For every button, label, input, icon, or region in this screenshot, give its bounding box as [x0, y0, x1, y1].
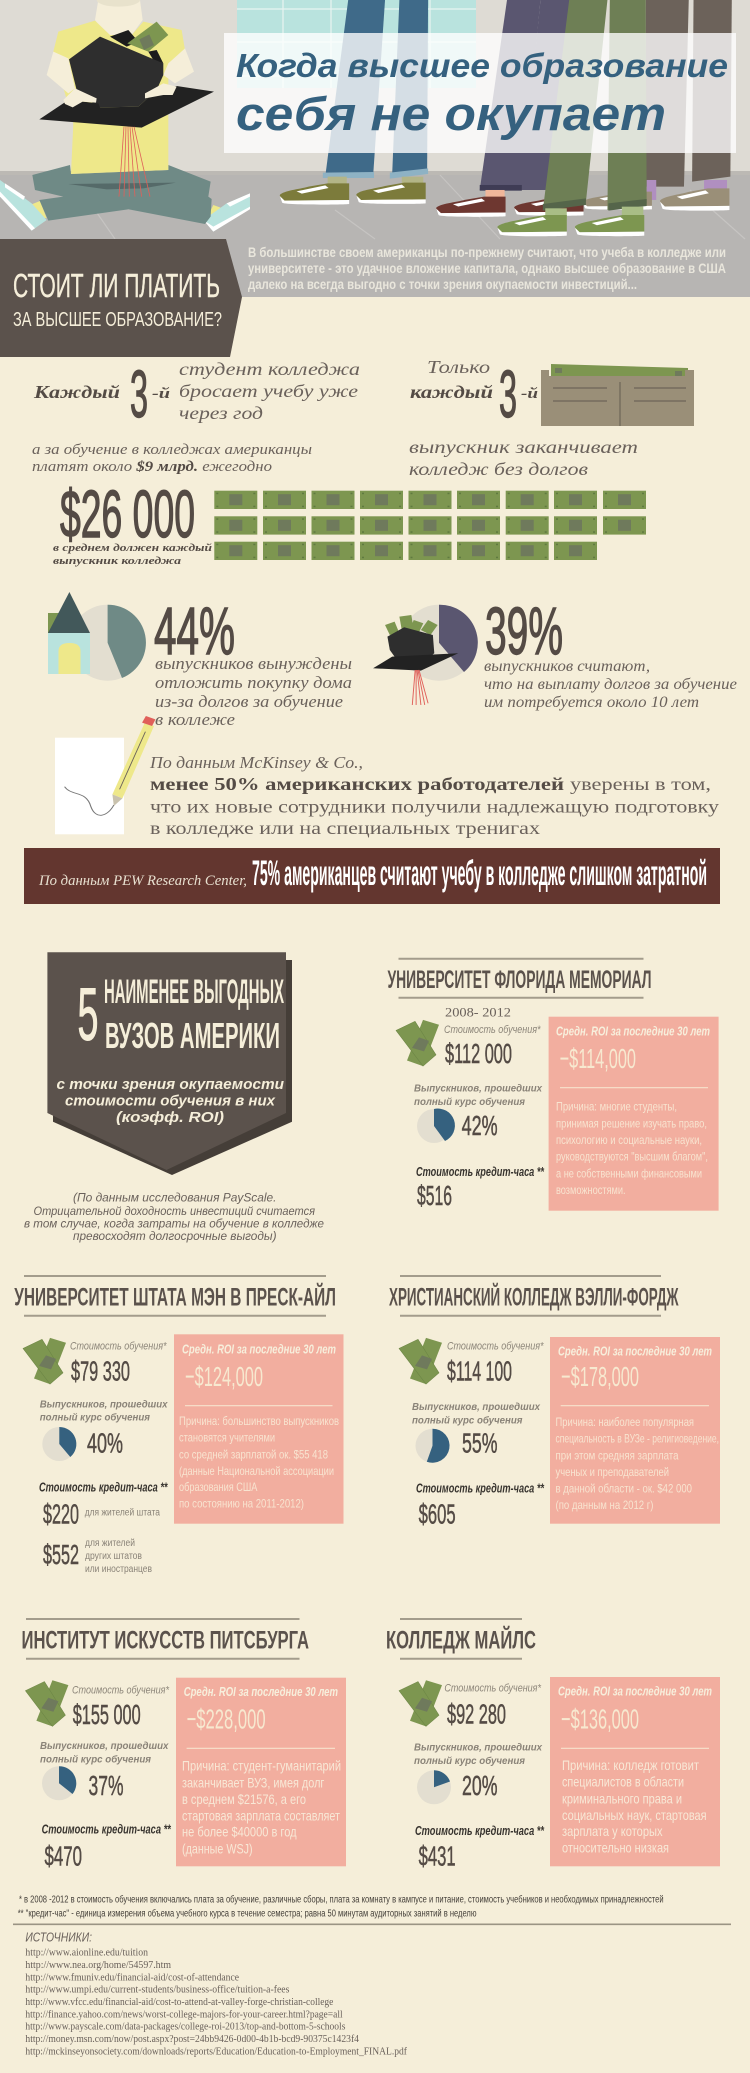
footnotes [18, 1894, 664, 1920]
intro text [248, 245, 726, 292]
panel: University of Maine at Presque Isle: других штатов [85, 1551, 142, 1562]
panel: Florida Memorial: психологию и социальные науки, [556, 1133, 702, 1147]
panel: Art Institute of Pittsburgh: Средн. ROI за последние 30 лет [184, 1685, 338, 1699]
panel: Florida Memorial: Стоимость обучения* [444, 1024, 541, 1036]
panel: Florida Memorial: $112 000 [445, 1038, 512, 1069]
panel: Art Institute of Pittsburgh: −$228,000 [187, 1703, 266, 1734]
banner: PEW Research: По данным PEW Research Center, [38, 873, 247, 889]
shield: five least profitable: (коэфф. ROI) [116, 1110, 224, 1126]
panel: University of Maine at Presque Isle: (данные Национальной ассоциации [179, 1464, 334, 1478]
text: McKinsey: менее 50% американских работодателей [150, 774, 564, 794]
banner: is it worth paying [0, 239, 242, 357]
panel: University of Maine at Presque Isle: −$124,000 [185, 1361, 263, 1392]
stat: 26000 debt: $26 000 [60, 477, 195, 552]
panel: University of Maine at Presque Isle: $552 [43, 1539, 79, 1570]
panel: Art Institute of Pittsburgh: $155 000 [73, 1699, 141, 1730]
stat: every third student drops out: через год [179, 403, 263, 423]
panel: Miles College: специалистов в области [562, 1774, 684, 1790]
panel: Art Institute of Pittsburgh [22, 1619, 346, 1872]
panel: Valley Forge Christian College: Выпускников, прошедших [412, 1401, 541, 1413]
stat: every third graduate without debt: Только [427, 357, 490, 377]
stat: every third graduate without debt: 3 [499, 357, 517, 432]
panel: University of Maine at Presque Isle: полный курс обучения [40, 1412, 150, 1424]
text: 9 billion: а за обучение в колледжах американцы [32, 442, 312, 458]
panel: Valley Forge Christian College: Стоимость кредит-часа ** [416, 1481, 545, 1495]
panel: University of Maine at Presque Isle: Средн. ROI за последние 30 лет [182, 1342, 336, 1356]
text: НАИМЕНЕЕ ВЫГОДНЫХ [104, 973, 284, 1011]
panel: Miles College: социальных наук, стартовая [562, 1807, 707, 1823]
panel: Art Institute of Pittsburgh: не более $40000 в год [182, 1824, 297, 1840]
panel: Valley Forge Christian College: Стоимость обучения* [447, 1340, 544, 1352]
text: McKinsey [149, 753, 719, 838]
panel: Valley Forge Christian College: (по данным на 2012 г) [556, 1498, 654, 1512]
shield: five least profitable: 5 [78, 973, 98, 1056]
stat 39% [484, 594, 737, 711]
stat 44%: из-за долгов за обучение [155, 692, 343, 711]
panel: Art Institute of Pittsburgh: ИНСТИТУТ ИСКУССТВ ПИТСБУРГА [22, 1626, 309, 1654]
stat 39%: им потребуется около 10 лет [484, 694, 699, 711]
title box: Когда высшее образование [236, 47, 728, 84]
panel: Art Institute of Pittsburgh: стартовая зарплата составляет [182, 1808, 340, 1824]
panel: Florida Memorial: руководствуются "высшим благом", [556, 1150, 708, 1164]
panel: Florida Memorial [388, 959, 719, 1211]
sources: http://finance.yahoo.com/news/worst-college-majors-for-your-career.html?page=all [25, 2009, 343, 2020]
stat: every third graduate without debt [409, 357, 638, 479]
shield: five least profitable [47, 952, 292, 1175]
panel: Valley Forge Christian College: 55% [462, 1428, 498, 1459]
panel: Miles College: $431 [419, 1841, 456, 1872]
panel: University of Maine at Presque Isle: для жителей [85, 1538, 135, 1549]
note: PayScale: (По данным исследования PayScale. [73, 1193, 276, 1205]
icon: wallet [541, 364, 694, 426]
banknote rows [214, 491, 646, 560]
panel: Miles College: 20% [462, 1770, 498, 1801]
panel: Florida Memorial: 2008- 2012 [445, 1005, 511, 1020]
stat: every third student drops out: бросает учебу уже [179, 381, 358, 401]
note: PayScale: превосходят долгосрочные выгоды) [73, 1231, 277, 1243]
panel: University of Maine at Presque Isle: 40% [87, 1427, 123, 1458]
panel: University of Maine at Presque Isle: Выпускников, прошедших [40, 1398, 169, 1410]
panel: Florida Memorial: Выпускников, прошедших [414, 1083, 543, 1095]
panel: Florida Memorial: 42% [462, 1110, 498, 1141]
panel: University of Maine at Presque Isle: для жителей штата [85, 1508, 160, 1519]
stat: every third student drops out: студент колледжа [179, 359, 360, 379]
pie and house icon 44% [48, 592, 146, 681]
sources: http://money.msn.com/now/post.aspx?post=24bb9426-0d00-4b1b-bcd9-90375c1423f4 [25, 2034, 359, 2045]
pie and hat icon 39% [373, 605, 478, 705]
panel: Miles College: полный курс обучения [414, 1755, 525, 1767]
note: PayScale: в том случае, когда затраты на обучение в колледже [24, 1219, 324, 1231]
window [237, 0, 476, 88]
stat 44%: отложить покупку дома [155, 673, 352, 692]
panel: Valley Forge Christian College: в данной области - ок. $42 000 [556, 1481, 692, 1495]
title box [224, 33, 736, 153]
panel: Art Institute of Pittsburgh: Стоимость кредит-часа ** [42, 1822, 172, 1836]
intro text: далеко на всегда выгодно с точки зрения окупаемости инвестиций... [248, 277, 637, 292]
panel: Valley Forge Christian College: ученых и преподавателей [556, 1465, 669, 1479]
panel: Art Institute of Pittsburgh: Стоимость обучения* [72, 1684, 170, 1696]
panel: Florida Memorial: а не собственными финансовыми [556, 1166, 702, 1180]
panel: Valley Forge Christian College [389, 1276, 720, 1529]
shield: five least profitable: стоимости обучения в них [65, 1094, 276, 1110]
person with hat and bag [0, 0, 250, 232]
panel: University of Maine at Presque Isle: или иностранцев [85, 1564, 152, 1575]
panel: Valley Forge Christian College: −$178,000 [561, 1361, 639, 1392]
legs and shoes of the crowd [280, 0, 732, 236]
sources: http://www.vfcc.edu/financial-aid/cost-to-attend-at-valley-forge-christian-college [25, 1997, 334, 2008]
panel: Valley Forge Christian College: при этом средняя зарплата [556, 1448, 679, 1462]
shield: five least profitable: с точки зрения окупаемости [56, 1077, 284, 1093]
text: McKinsey: в колледже или на специальных тренигах [150, 818, 540, 838]
panel: University of Maine at Presque Isle: $79 330 [71, 1356, 130, 1387]
shield: five least profitable: ВУЗОВ АМЕРИКИ [105, 1015, 280, 1056]
stat: 26000 debt [53, 477, 212, 567]
sources: http://www.payscale.com/data-packages/college-roi-2013/top-and-bottom-5-schools [25, 2022, 345, 2033]
panel: Art Institute of Pittsburgh: (данные WSJ) [182, 1840, 253, 1856]
text: 9 billion [32, 442, 312, 475]
panel: Florida Memorial: полный курс обучения [414, 1096, 525, 1108]
sources: http://www.umpi.edu/current-students/business-office/tuition-a-fees [25, 1985, 290, 1996]
stat 44%: 44% [154, 594, 235, 669]
text: McKinsey: что их новые сотрудники получили надлежащую подготовку [150, 797, 719, 817]
sources: http://www.fmuniv.edu/financial-aid/cost-of-attendance [25, 1972, 240, 1983]
text: 9 billion: платят около $9 млрд. ежегодно [32, 459, 273, 475]
panel: Miles College: Выпускников, прошедших [414, 1742, 543, 1754]
panel: University of Maine at Presque Isle: УНИВЕРСИТЕТ ШТАТА МЭН В ПРЕСК-АЙЛ [14, 1282, 336, 1312]
text: McKinsey: уверены в том, [570, 774, 711, 794]
stat 44%: в коллеже [155, 710, 236, 729]
stat: 26000 debt: выпускник колледжа [53, 555, 182, 567]
panel: Miles College: криминального права и [562, 1790, 682, 1806]
panel: Miles College: относительно низкая [562, 1840, 669, 1856]
panel: Miles College: Причина: колледж готовит [562, 1757, 699, 1773]
text: McKinsey: По данным McKinsey & Co., [149, 753, 363, 772]
panel: University of Maine at Presque Isle [14, 1276, 344, 1575]
panel: Valley Forge Christian College: Причина: наиболее популярная [556, 1415, 694, 1429]
panel: University of Maine at Presque Isle: $220 [43, 1498, 79, 1529]
note: PayScale: Отрицательной доходность инвестиций считается [34, 1206, 315, 1218]
panel: Miles College: Стоимость обучения* [444, 1683, 542, 1695]
panel: Florida Memorial: $516 [417, 1180, 452, 1211]
panel: Art Institute of Pittsburgh: Причина: студент-гуманитарий [182, 1758, 341, 1774]
note: PayScale [24, 1193, 324, 1243]
panel: Florida Memorial: возможностями. [556, 1183, 626, 1197]
icon: paper and pencil [55, 716, 155, 834]
panel: Valley Forge Christian College: $605 [419, 1498, 456, 1529]
panel: University of Maine at Presque Isle: образования США [179, 1480, 257, 1494]
panel: University of Maine at Presque Isle: Причина: большинство выпускников [179, 1414, 339, 1428]
stat: 26000 debt: в среднем должен каждый [53, 542, 212, 554]
stat: every third graduate without debt: выпускник заканчивает [409, 437, 638, 457]
sources: http://www.aionline.edu/tuition [25, 1948, 148, 1959]
footnotes: ** "кредит-час" - единица измерения объема учебного курса в течение семестра; равна 50 минутам аудиторных занятий в неделю [18, 1908, 477, 1920]
panel: University of Maine at Presque Isle: Стоимость обучения* [70, 1340, 167, 1352]
stat 39%: выпускников считают, [484, 658, 650, 675]
header illustration [0, 0, 750, 297]
banner: is it worth paying: СТОИТ ЛИ ПЛАТИТЬ [13, 267, 220, 304]
panel: University of Maine at Presque Isle: Стоимость кредит-часа ** [39, 1481, 168, 1495]
stat: every third graduate without debt: каждый [410, 382, 493, 402]
stat 44% [154, 594, 352, 729]
panel: Miles College [386, 1619, 720, 1872]
stat: every third student drops out: Каждый [33, 382, 120, 402]
panel: Art Institute of Pittsburgh: Выпускников, прошедших [40, 1740, 169, 1752]
stat: every third student drops out [33, 357, 360, 432]
panel: University of Maine at Presque Isle: со средней зарплатой ок. $55 418 [179, 1447, 328, 1461]
stat: every third graduate without debt: колледж без долгов [409, 459, 588, 479]
panel: Miles College: зарплата у которых [562, 1823, 663, 1839]
sources: http://www.nea.org/home/54597.htm [25, 1960, 171, 1971]
panel: University of Maine at Presque Isle: по состоянию на 2011-2012) [179, 1497, 304, 1511]
panel: Art Institute of Pittsburgh: заканчивает ВУЗ, имея долг [182, 1774, 324, 1790]
panel: Valley Forge Christian College: полный курс обучения [412, 1414, 522, 1426]
panel: Florida Memorial: −$114,000 [560, 1043, 636, 1074]
stat: every third student drops out: 3 [130, 357, 148, 432]
panel: Florida Memorial: принимая решение изучать право, [556, 1116, 707, 1130]
stat: every third student drops out: -й [152, 386, 170, 402]
panel: Art Institute of Pittsburgh: полный курс обучения [40, 1753, 151, 1765]
panel: Miles College: −$136,000 [561, 1703, 639, 1734]
panel: Florida Memorial: Стоимость кредит-часа ** [416, 1165, 545, 1179]
stat 44%: выпускников вынуждены [155, 654, 352, 673]
banner: is it worth paying: ЗА ВЫСШЕЕ ОБРАЗОВАНИЕ? [13, 309, 222, 331]
panel: Art Institute of Pittsburgh: $470 [44, 1841, 82, 1872]
sources: ИСТОЧНИКИ: [25, 1930, 92, 1945]
sources: http://mckinseyonsociety.com/downloads/reports/Education/Education-to-Employment_FINAL.pdf [25, 2046, 408, 2057]
stat 39%: что на выплату долгов за обучение [484, 676, 737, 693]
panel: Florida Memorial: Причина: многие студенты, [556, 1100, 677, 1114]
panel: Miles College: КОЛЛЕДЖ МАЙЛС [386, 1624, 536, 1654]
title box: себя не окупает [236, 87, 666, 140]
stat: every third graduate without debt: -й [521, 386, 538, 402]
panel: Art Institute of Pittsburgh: в среднем $21576, а его [182, 1791, 306, 1807]
panel: Valley Forge Christian College: $114 100 [447, 1356, 512, 1387]
sources [25, 1930, 408, 2057]
panel: University of Maine at Presque Isle: становятся учителями [179, 1431, 275, 1445]
panel: Miles College: $92 280 [447, 1698, 506, 1729]
stat 39%: 39% [485, 594, 563, 669]
panel: Art Institute of Pittsburgh: 37% [88, 1770, 124, 1801]
panel: Miles College: Стоимость кредит-часа ** [415, 1824, 545, 1838]
banner: PEW Research [24, 848, 720, 904]
